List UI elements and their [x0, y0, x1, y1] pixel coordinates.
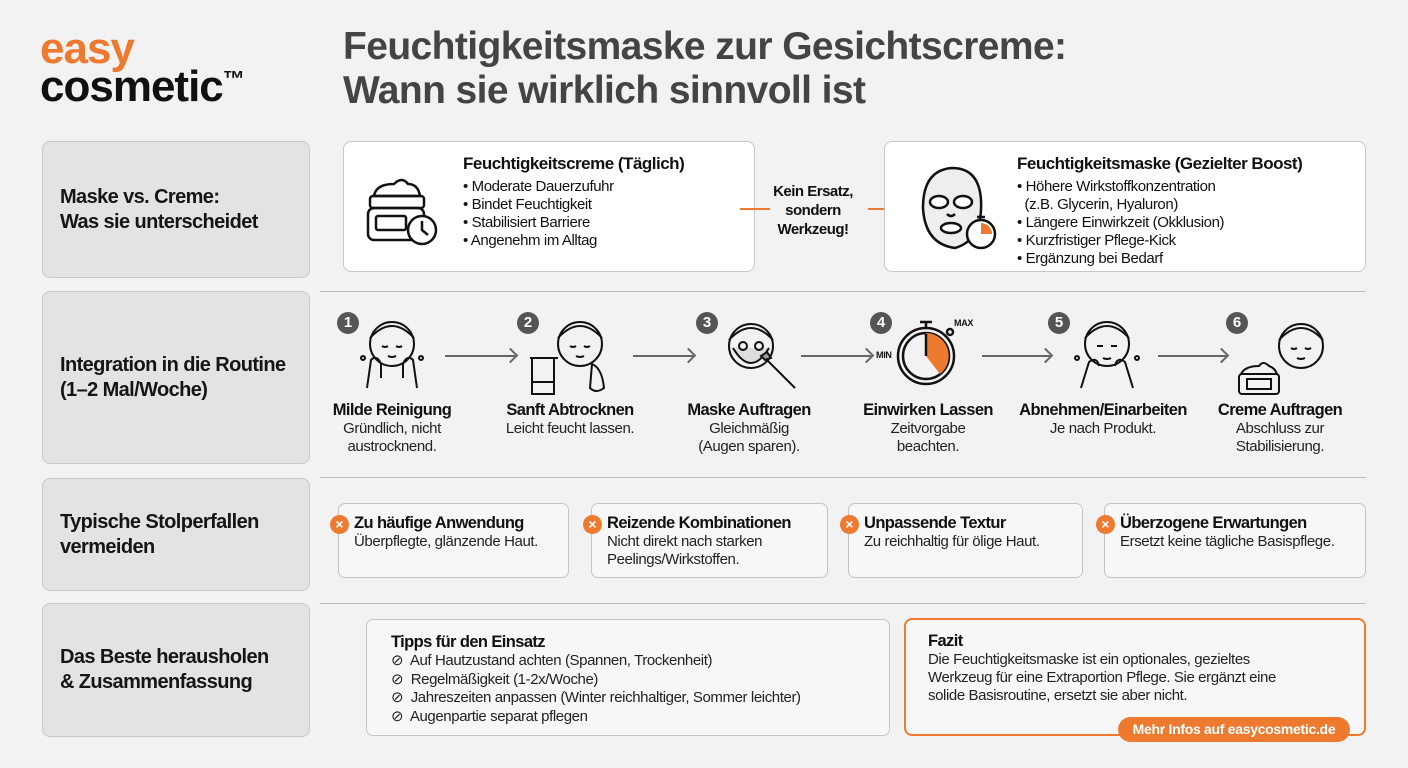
- icon: stopwatch: [876, 318, 974, 386]
- label: row 3: [42, 478, 310, 591]
- card: Feuchtigkeitsmaske: • Kurzfristiger Pflege-Kick: [1017, 232, 1176, 249]
- text: 5: [1055, 314, 1063, 331]
- label: row 4: Das Beste herausholen: [60, 646, 269, 668]
- pitfall 1: [338, 503, 569, 578]
- pitfall 3: Zu reichhaltig für ölige Haut.: [864, 533, 1040, 550]
- arrow: [445, 355, 515, 357]
- label: row 1: Was sie unterscheidet: [60, 210, 258, 232]
- text: 2: [524, 314, 532, 331]
- arrow: [801, 355, 871, 357]
- card: Feuchtigkeitscreme: • Angenehm im Alltag: [463, 232, 597, 249]
- conclusion box: Fazit: Fazit: [928, 632, 963, 650]
- title: Feuchtigkeitsmaske zur Gesichtscreme:: [343, 25, 1066, 68]
- text: 3: [703, 314, 711, 331]
- tips box: [366, 619, 890, 736]
- card: Feuchtigkeitsmaske: • Ergänzung bei Bedarf: [1017, 250, 1163, 267]
- conclusion box: Fazit: [904, 618, 1366, 736]
- text: Leicht feucht lassen.: [506, 420, 634, 437]
- arrow: [633, 355, 693, 357]
- card: Feuchtigkeitscreme: • Bindet Feuchtigkeit: [463, 196, 592, 213]
- pitfall 4: [1104, 503, 1366, 578]
- button: Mehr Infos: [1118, 717, 1350, 742]
- pitfall 2: Nicht direkt nach starken: [607, 533, 762, 550]
- pitfall 2: ×: [588, 516, 597, 532]
- text: Milde Reinigung: [333, 401, 451, 419]
- text: (Augen sparen).: [698, 438, 800, 455]
- step 5: [1019, 312, 1187, 437]
- label: row 2: Integration in die Routine: [60, 354, 286, 376]
- text: beachten.: [897, 438, 959, 455]
- text: 6: [1233, 314, 1241, 331]
- step 3: [687, 312, 811, 455]
- step 2: [506, 312, 634, 437]
- pitfall 4: ×: [1101, 516, 1110, 532]
- icon: sheet mask with timer: [922, 166, 996, 250]
- step 4: [863, 312, 993, 455]
- pitfall 1: ×: [335, 516, 344, 532]
- pitfall 3: Unpassende Textur: [864, 514, 1006, 532]
- pitfall 2: Peelings/Wirkstoffen.: [607, 551, 739, 568]
- arrow: [982, 355, 1050, 357]
- pitfall 2: [591, 503, 828, 578]
- icon: cream jar with clock: [366, 178, 438, 246]
- text: Einwirken Lassen: [863, 401, 993, 419]
- text: Je nach Produkt.: [1050, 420, 1156, 437]
- title: [343, 25, 1066, 112]
- label: row 3: Typische Stolperfallen: [60, 510, 259, 532]
- card: Feuchtigkeitsmaske: • Höhere Wirkstoffkonzentration: [1017, 178, 1216, 195]
- pitfall 2: Reizende Kombinationen: [607, 514, 791, 532]
- pitfall 1: Zu häufige Anwendung: [354, 514, 524, 532]
- card: Feuchtigkeitsmaske: Feuchtigkeitsmaske (Gezielter Boost): [1017, 154, 1302, 173]
- text: Abnehmen/Einarbeiten: [1019, 401, 1187, 419]
- icon: stopwatch: MAX: [954, 318, 973, 328]
- text: Gleichmäßig: [709, 420, 789, 437]
- card: Feuchtigkeitsmaske: (z.B. Glycerin, Hyaluron): [1025, 196, 1178, 213]
- label: row 1: Maske vs. Creme:: [60, 186, 219, 208]
- pitfall 1: Überpflegte, glänzende Haut.: [354, 533, 538, 550]
- pitfall 3: [848, 503, 1083, 578]
- text: austrocknend.: [347, 438, 437, 455]
- pitfall 4: Ersetzt keine tägliche Basispflege.: [1120, 533, 1334, 550]
- pitfall 3: ×: [845, 516, 854, 532]
- tips box: ⊘ Augenpartie separat pflegen: [391, 708, 588, 724]
- conclusion box: Fazit: Die Feuchtigkeitsmaske ist ein optionales, gezieltes: [928, 651, 1250, 668]
- text: Gründlich, nicht: [343, 420, 441, 437]
- tips box: ⊘ Auf Hautzustand achten (Spannen, Trockenheit): [391, 652, 712, 669]
- callout: Kein Ersatz: Kein Ersatz,: [773, 183, 853, 200]
- logo: [40, 24, 244, 111]
- card: Feuchtigkeitscreme: Feuchtigkeitscreme (Täglich): [463, 154, 684, 173]
- logo: cosmetic™: [40, 62, 244, 111]
- card: Feuchtigkeitscreme: • Moderate Dauerzufuhr: [463, 178, 614, 195]
- icon: face with towel: [530, 321, 606, 395]
- callout: Kein Ersatz: sondern: [785, 202, 841, 219]
- callout: Kein Ersatz: Werkzeug!: [777, 221, 849, 238]
- text: 1: [344, 314, 352, 331]
- conclusion box: Fazit: Werkzeug für eine Extraportion Pflege. Sie ergänzt eine: [928, 669, 1276, 686]
- text: Abschluss zur: [1236, 420, 1324, 437]
- icon: face washing: [360, 321, 424, 388]
- icon: stopwatch: MIN: [876, 350, 892, 360]
- card: Feuchtigkeitsmaske: [884, 141, 1366, 272]
- card: Feuchtigkeitscreme: • Stabilisiert Barriere: [463, 214, 590, 231]
- text: Sanft Abtrocknen: [506, 401, 634, 419]
- label: row 3: vermeiden: [60, 536, 155, 558]
- text: Creme Auftragen: [1218, 401, 1342, 419]
- icon: face with cream jar: [1238, 323, 1324, 395]
- card: Feuchtigkeitsmaske: • Längere Einwirkzeit (Okklusion): [1017, 214, 1224, 231]
- text: Zeitvorgabe: [891, 420, 965, 437]
- tips box: ⊘ Jahreszeiten anpassen (Winter reichhaltiger, Sommer leichter): [391, 689, 801, 706]
- tips box: ⊘ Regelmäßigkeit (1-2x/Woche): [391, 670, 598, 688]
- conclusion box: Fazit: solide Basisroutine, ersetzt sie aber nicht.: [928, 687, 1187, 704]
- card: Feuchtigkeitscreme: [343, 141, 755, 272]
- callout: Kein Ersatz: [740, 183, 884, 238]
- label: row 4: [42, 603, 310, 737]
- label: row 2: (1–2 Mal/Woche): [60, 378, 207, 400]
- text: Stabilisierung.: [1236, 438, 1324, 455]
- arrow: [1158, 355, 1226, 357]
- icon: face removing mask: [1074, 321, 1140, 388]
- label: row 4: & Zusammenfassung: [60, 671, 252, 693]
- step 6: [1218, 312, 1342, 455]
- label: row 1: [42, 141, 310, 278]
- text: Maske Auftragen: [687, 401, 811, 419]
- button: Mehr Infos: Mehr Infos auf easycosmetic.de: [1133, 721, 1335, 737]
- tips box: Tipps für den Einsatz: [391, 633, 545, 651]
- title: Wann sie wirklich sinnvoll ist: [343, 69, 865, 112]
- text: 4: [877, 314, 885, 331]
- pitfall 4: Überzogene Erwartungen: [1120, 514, 1307, 532]
- label: row 2: [42, 291, 310, 464]
- icon: face with mask and brush: [728, 323, 796, 389]
- step 1: [333, 312, 451, 455]
- logo: easy: [40, 24, 134, 73]
